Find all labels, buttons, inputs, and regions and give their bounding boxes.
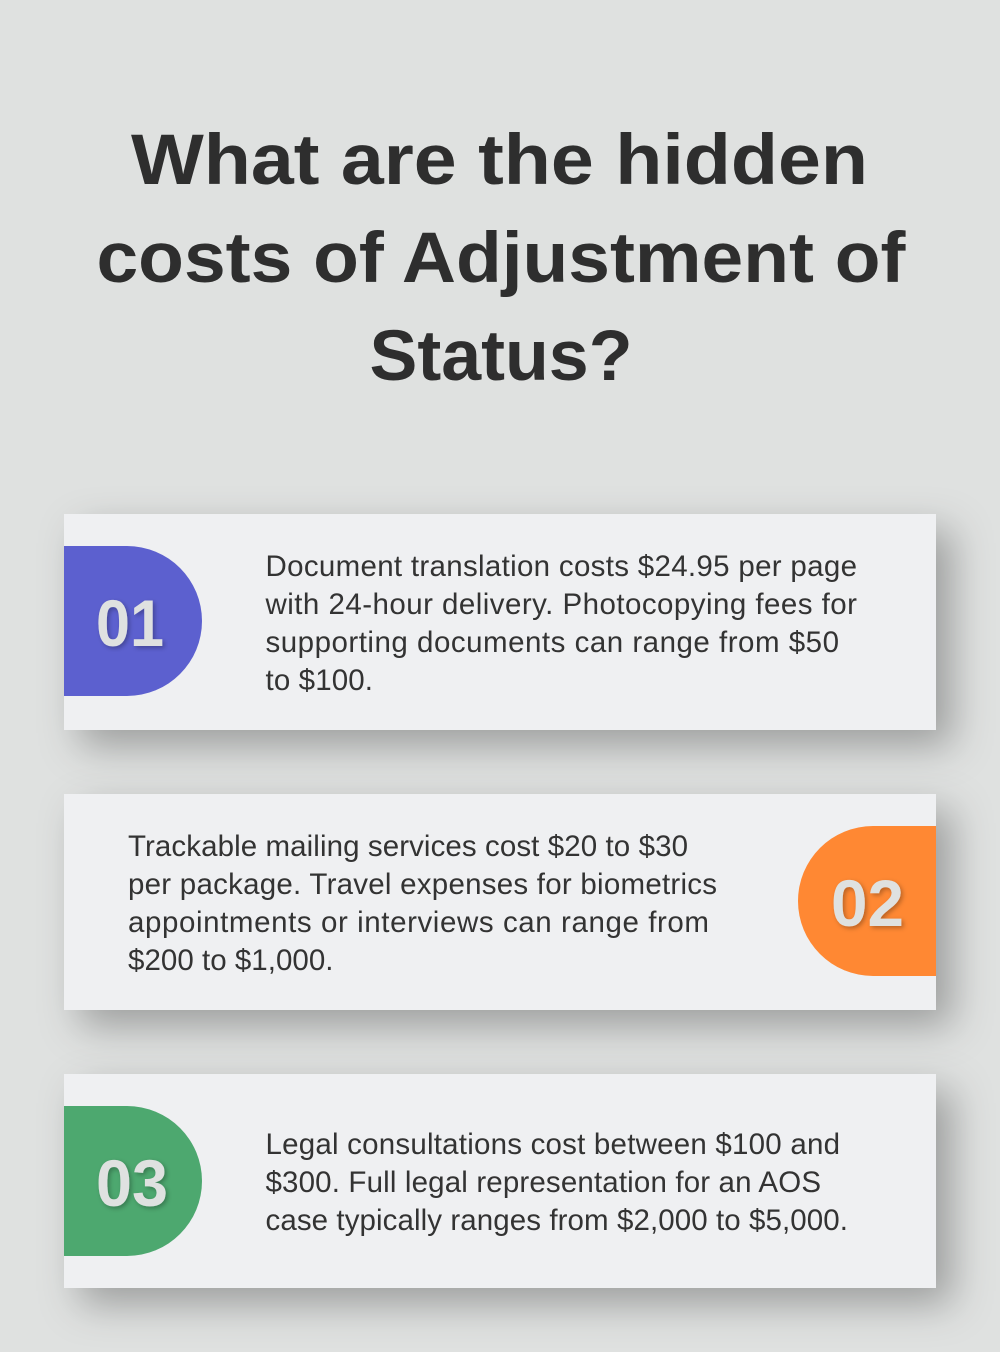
badge: 03 (64, 1106, 202, 1256)
text block: legal fees: Legal consultations cost between $100 and (266, 1128, 840, 1161)
panel: card 03 legal costs (64, 1074, 936, 1288)
text block: translation and photocopying: to $100. (266, 664, 373, 697)
badge: 02 (798, 826, 936, 976)
text block: legal fees: case typically ranges from $2,000 to $5,000. (266, 1204, 848, 1237)
text block: translation and photocopying: with 24-hour delivery. Photocopying fees for (264, 588, 857, 621)
text block: mailing and travel costs: $200 to $1,000. (128, 944, 334, 977)
title: What are the hidden (131, 121, 868, 200)
text block: legal fees: $300. Full legal representation for an AOS (266, 1166, 821, 1199)
title: costs of Adjustment of (96, 219, 906, 298)
text block: mailing and travel costs (128, 830, 717, 977)
text block: mailing and travel costs: appointments or interviews can range from (128, 906, 709, 939)
text block: mailing and travel costs: Trackable mailing services cost $20 to $30 (128, 830, 688, 863)
badge: 01: 01 (96, 586, 164, 660)
text block: translation and photocopying: supporting documents can range from $50 (266, 626, 839, 659)
panel: card 02 mailing and travel (64, 794, 936, 1010)
text block: translation and photocopying (264, 550, 857, 697)
badge: 01 (64, 546, 202, 696)
text block: legal fees (266, 1128, 848, 1237)
panel: card 01 document costs (64, 514, 936, 730)
text block: mailing and travel costs: per package. Travel expenses for biometrics (128, 868, 717, 901)
badge: 02: 02 (831, 866, 904, 940)
text block: translation and photocopying: Document translation costs $24.95 per page (266, 550, 857, 583)
badge: 03: 03 (96, 1146, 168, 1220)
title: Status? (370, 317, 632, 396)
title (96, 121, 906, 396)
